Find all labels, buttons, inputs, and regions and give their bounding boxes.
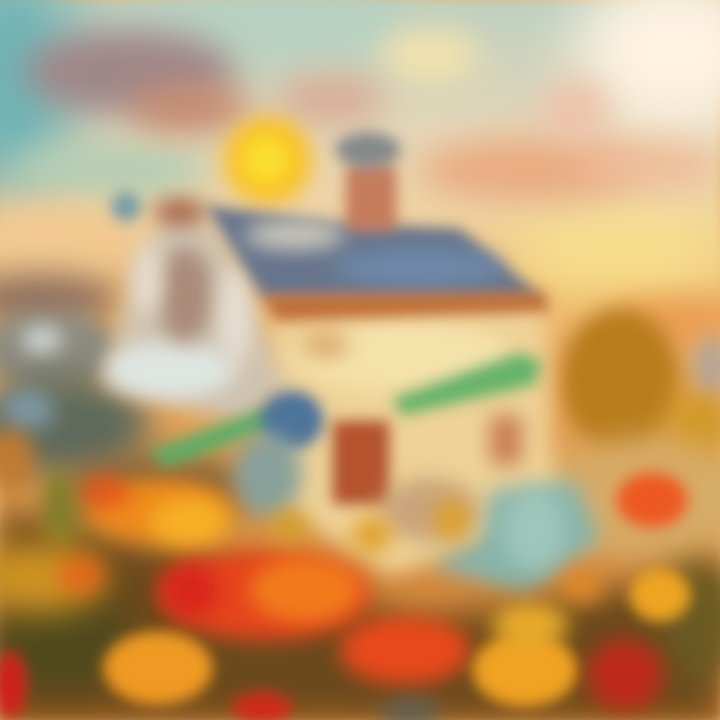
green arrow right: [392, 352, 542, 416]
figure or equipment below arrow: [234, 433, 302, 517]
small round vent: [111, 192, 141, 222]
flower garden: [0, 428, 720, 720]
chimney: [345, 165, 397, 231]
door: [332, 420, 390, 505]
clouds: [25, 30, 720, 202]
sun: [224, 116, 312, 204]
tree at right: [540, 308, 720, 560]
green arrow left: [150, 390, 324, 468]
distant houses at left: [0, 274, 250, 525]
house wall: [270, 300, 570, 575]
house: [105, 132, 570, 575]
solar panel on the ground: [430, 480, 600, 595]
roof eave: [262, 292, 550, 322]
window: [490, 415, 522, 465]
roof solar panels: [205, 205, 545, 298]
flowers: [88, 478, 232, 542]
left gable: [105, 205, 285, 425]
